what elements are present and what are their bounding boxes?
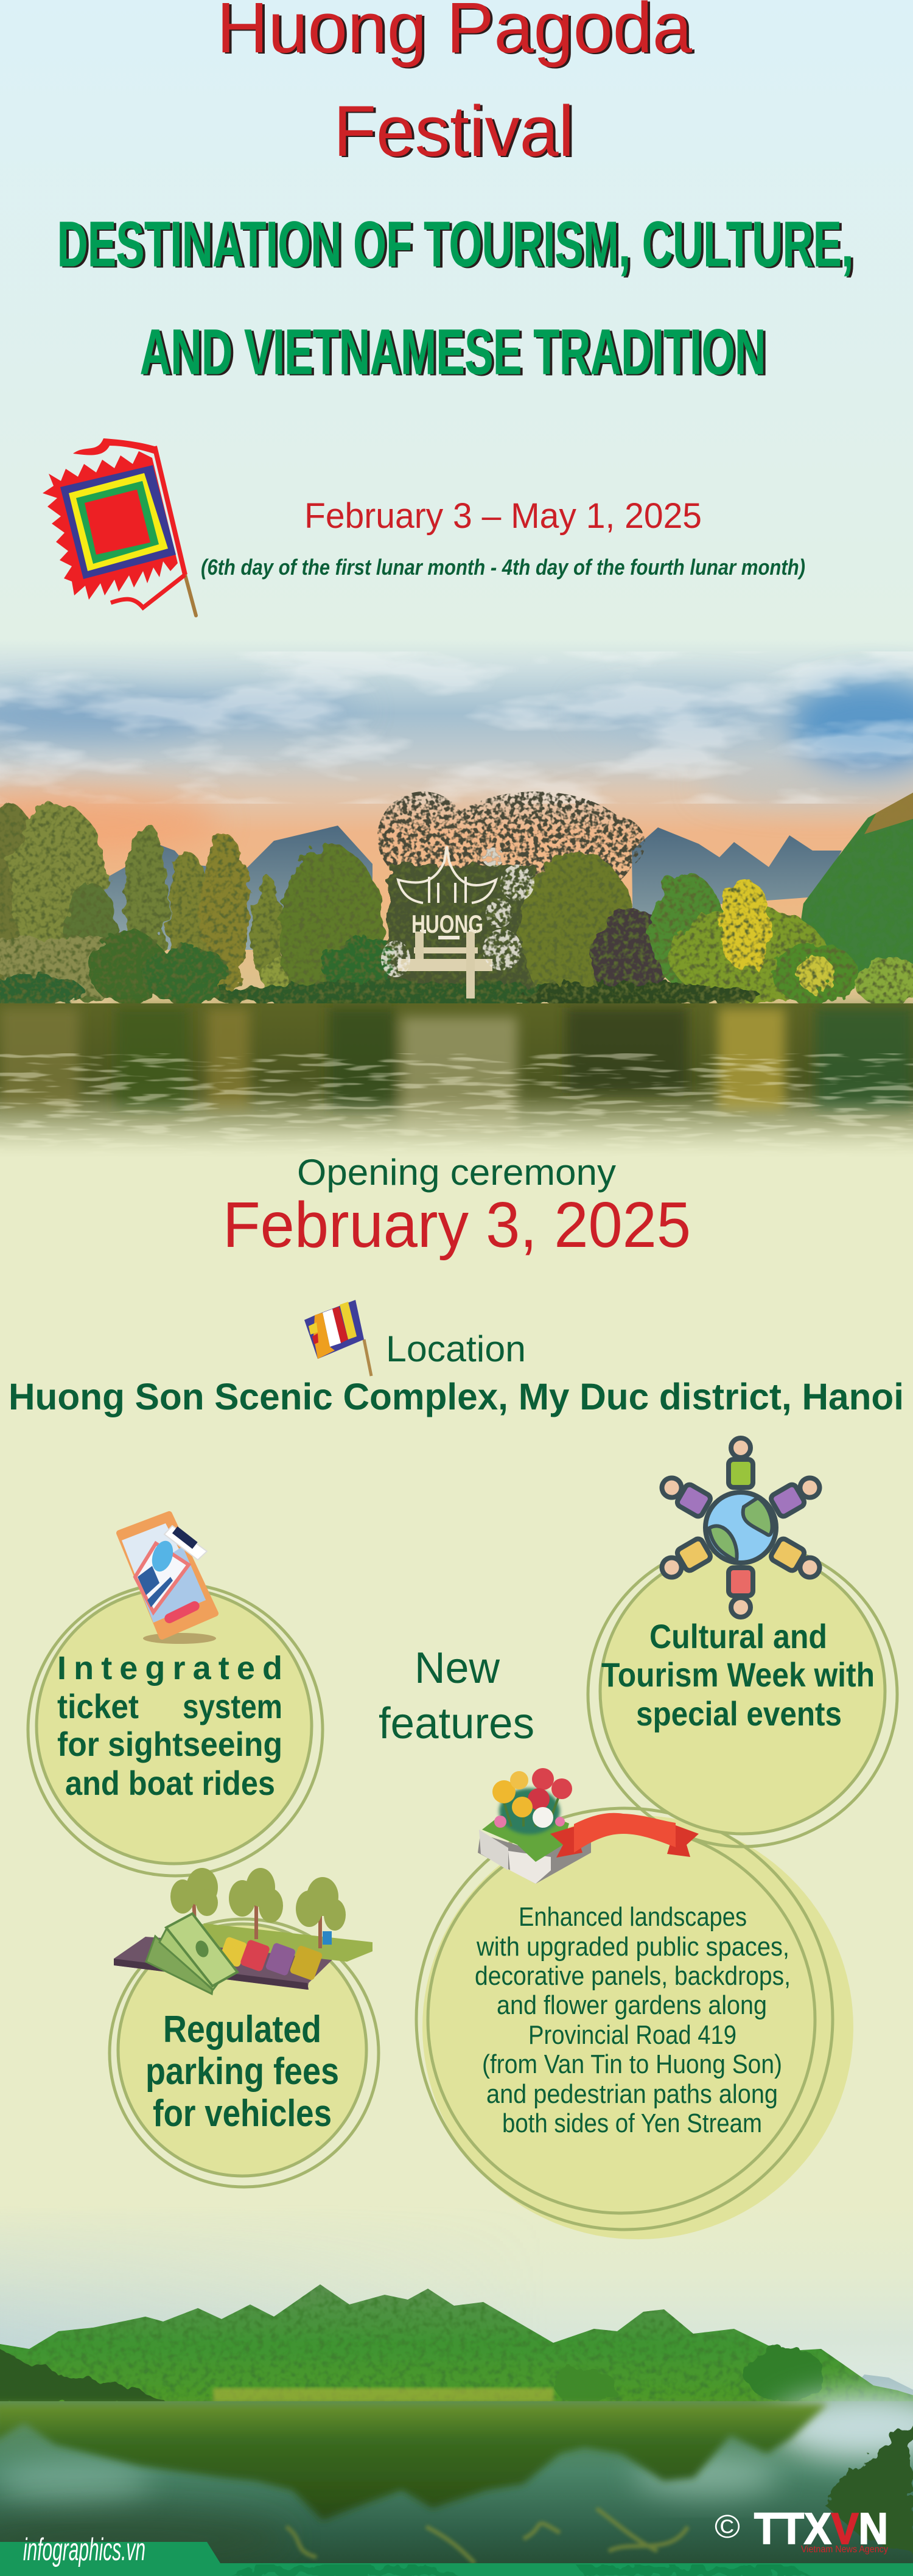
heading: new features bbox=[379, 1644, 534, 1748]
title bbox=[217, 0, 692, 172]
logo: TTXVN copyright: TTXVN bbox=[754, 2505, 888, 2553]
text: enhanced landscapes: Provincial Road 419 bbox=[528, 2020, 736, 2050]
title: Festival bbox=[334, 91, 574, 172]
panel: new features circles bbox=[28, 1542, 897, 2239]
panel: cultural week circle bbox=[588, 1542, 897, 1847]
text: regulated parking fees bbox=[145, 2009, 339, 2135]
text: enhanced landscapes: decorative panels, backdrops, bbox=[475, 1961, 791, 1991]
text: cultural and tourism week: special events bbox=[636, 1694, 842, 1733]
text: integrated ticket system: Integrated bbox=[57, 1650, 282, 1686]
text: enhanced landscapes: Enhanced landscapes bbox=[519, 1902, 747, 1932]
subtitle bbox=[57, 209, 853, 388]
heading: new features: features bbox=[379, 1699, 534, 1748]
icon: phone with ticket bbox=[119, 1514, 216, 1644]
text: regulated parking fees: for vehicles bbox=[153, 2093, 332, 2135]
opening ceremony bbox=[223, 1152, 691, 1261]
icon: festival banner flag bbox=[43, 438, 196, 616]
festival dates: February 3 – May 1, 2025 bbox=[304, 496, 702, 536]
photo: Huong Pagoda lake and sign bbox=[0, 639, 913, 1158]
logo: TTXVN copyright: Vietnam News Agency bbox=[801, 2544, 888, 2555]
text: integrated ticket system bbox=[57, 1650, 282, 1802]
icon: globe with people bbox=[657, 1438, 824, 1617]
text: regulated parking fees: Regulated bbox=[163, 2009, 321, 2051]
text: enhanced landscapes: and flower gardens along bbox=[497, 1990, 767, 2020]
photo: limestone mountains reflected in stream bbox=[0, 2284, 913, 2576]
opening ceremony: February 3, 2025 bbox=[223, 1189, 691, 1261]
text: enhanced landscapes: (from Van Tin to Huong Son) bbox=[482, 2049, 782, 2079]
icon: Buddhist flag bbox=[304, 1300, 371, 1376]
text: cultural and tourism week: Tourism Week with bbox=[601, 1655, 875, 1694]
text: integrated ticket system: system bbox=[183, 1687, 282, 1725]
location: Location bbox=[386, 1328, 526, 1369]
heading: new features: New bbox=[415, 1644, 500, 1693]
opening ceremony: Opening ceremony bbox=[297, 1152, 616, 1193]
icon: parking lot with cash bbox=[114, 1868, 373, 1994]
text: enhanced landscapes: with upgraded public spaces, bbox=[476, 1932, 789, 1962]
panel: ticket circle bbox=[28, 1584, 323, 1876]
text: regulated parking fees: parking fees bbox=[145, 2051, 339, 2093]
website credit: infographics.vn bbox=[23, 2532, 145, 2567]
logo: TTXVN copyright: © bbox=[715, 2508, 740, 2545]
icon: flower garden and red ribbon bbox=[478, 1768, 699, 1884]
text: cultural and tourism week: Cultural and bbox=[649, 1617, 827, 1655]
location: Huong Son Scenic Complex, My Duc district, Hanoi bbox=[9, 1376, 904, 1417]
text: enhanced landscapes: and pedestrian paths along bbox=[486, 2079, 778, 2109]
text: cultural and tourism week bbox=[601, 1617, 875, 1733]
footer bar bbox=[0, 2532, 913, 2576]
text: integrated ticket system: and boat rides bbox=[65, 1764, 275, 1802]
location bbox=[9, 1328, 904, 1417]
text: integrated ticket system: for sightseeing bbox=[57, 1725, 282, 1763]
text: enhanced landscapes: both sides of Yen Stream bbox=[502, 2108, 762, 2138]
text: integrated ticket system: ticket bbox=[57, 1687, 139, 1725]
text: enhanced landscapes bbox=[475, 1902, 791, 2138]
festival dates bbox=[201, 496, 805, 580]
sign: Chua Huong bbox=[398, 846, 496, 998]
sparse tree canopy behind sign bbox=[377, 791, 645, 880]
panel: landscapes circle bbox=[416, 1808, 853, 2239]
panel: parking circle bbox=[110, 1919, 379, 2187]
festival dates: (6th day of the first lunar month - 4th day of the fourth lunar month) bbox=[201, 555, 805, 580]
photo: Huong Pagoda lake and sign: HUONG bbox=[411, 910, 483, 938]
